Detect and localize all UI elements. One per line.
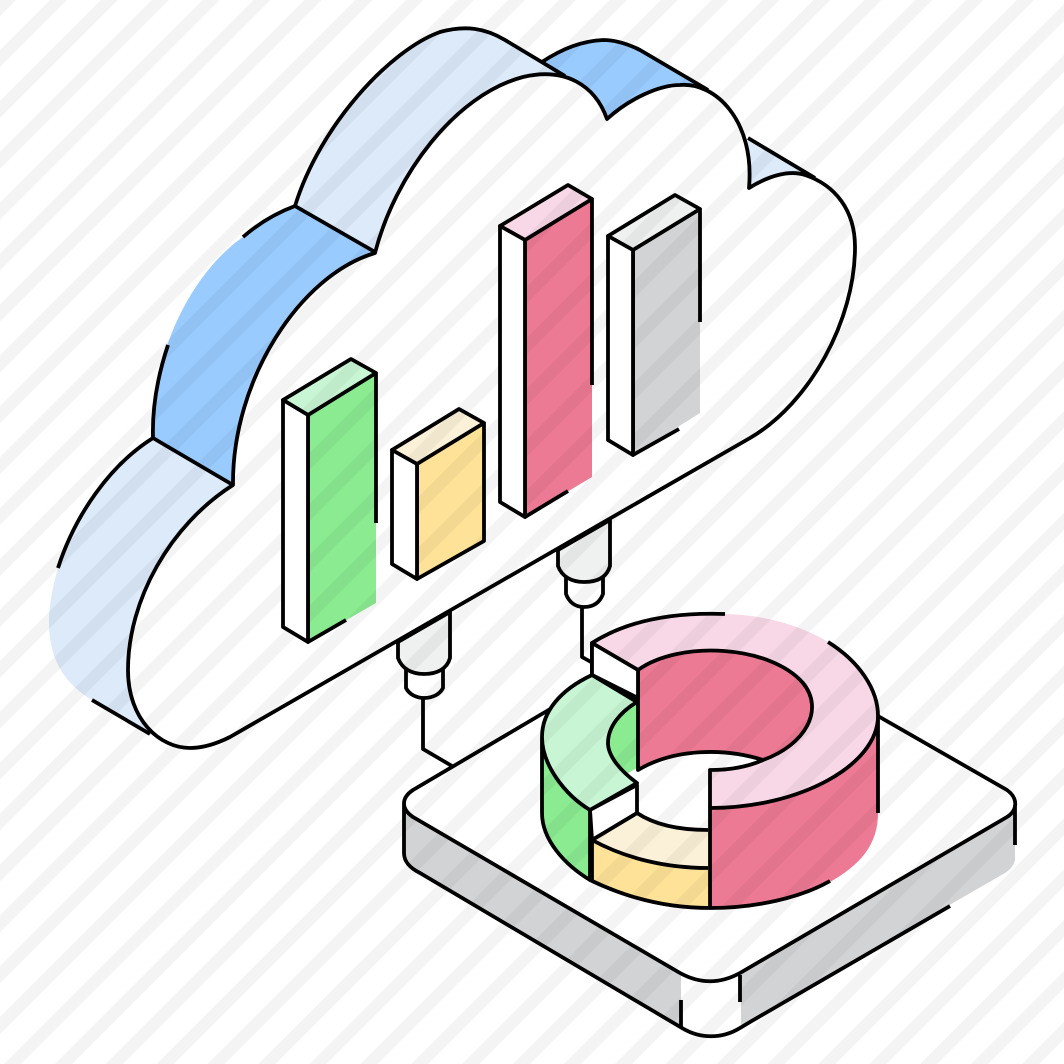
plug body right: [558, 520, 610, 582]
donut chart: [542, 614, 878, 908]
cloud side: top right lobe: [542, 40, 708, 119]
cloud side: middle left lobe: [153, 206, 375, 485]
donut white cut faces: [590, 643, 638, 840]
donut hole: [637, 752, 763, 830]
donut inner red wall: [638, 651, 812, 770]
connector cable right: [582, 607, 591, 662]
green bar side: [283, 400, 308, 642]
cloud side outlines: [58, 28, 815, 734]
platform: [403, 670, 1015, 1036]
donut yellow outer wall: [592, 840, 708, 908]
bar white side faces: [283, 226, 633, 642]
cloud: [49, 28, 855, 748]
cloud side: right notch: [748, 138, 810, 188]
donut yellow top: [592, 813, 708, 868]
cloud side: upper lobe: [295, 28, 565, 252]
lower cut face: [590, 785, 637, 840]
donut light green top: [542, 675, 637, 810]
yellow bar: [392, 409, 484, 579]
connector: right plug: [558, 520, 610, 662]
donut outlines green and yellow: [542, 643, 830, 908]
pink bar: [500, 185, 592, 517]
plug body left: [398, 612, 450, 674]
bar chart: [283, 185, 700, 642]
plug tip left: [406, 670, 443, 698]
platform right side: [741, 805, 1015, 1025]
grey bar side: [608, 236, 633, 455]
donut inner green wall: [608, 702, 637, 773]
upper cut face: [592, 643, 638, 698]
cloud side: lower left lobe: [49, 438, 233, 740]
donut outlines: [592, 614, 878, 908]
green bar: [283, 359, 376, 642]
donut green outer wall: [542, 737, 590, 880]
plug tip right: [566, 578, 603, 607]
donut pink top: [592, 614, 878, 808]
pink bar side: [500, 226, 525, 517]
platform top face: [403, 670, 1015, 981]
grey bar: [608, 195, 700, 455]
connector: left plug: [398, 612, 452, 766]
yellow bar side: [392, 450, 417, 579]
cloud front face: [128, 74, 855, 748]
platform left side: [404, 805, 681, 1028]
donut red outer wall: [710, 716, 878, 908]
platform outlines: [404, 708, 1015, 1036]
connector cable left: [423, 698, 452, 766]
